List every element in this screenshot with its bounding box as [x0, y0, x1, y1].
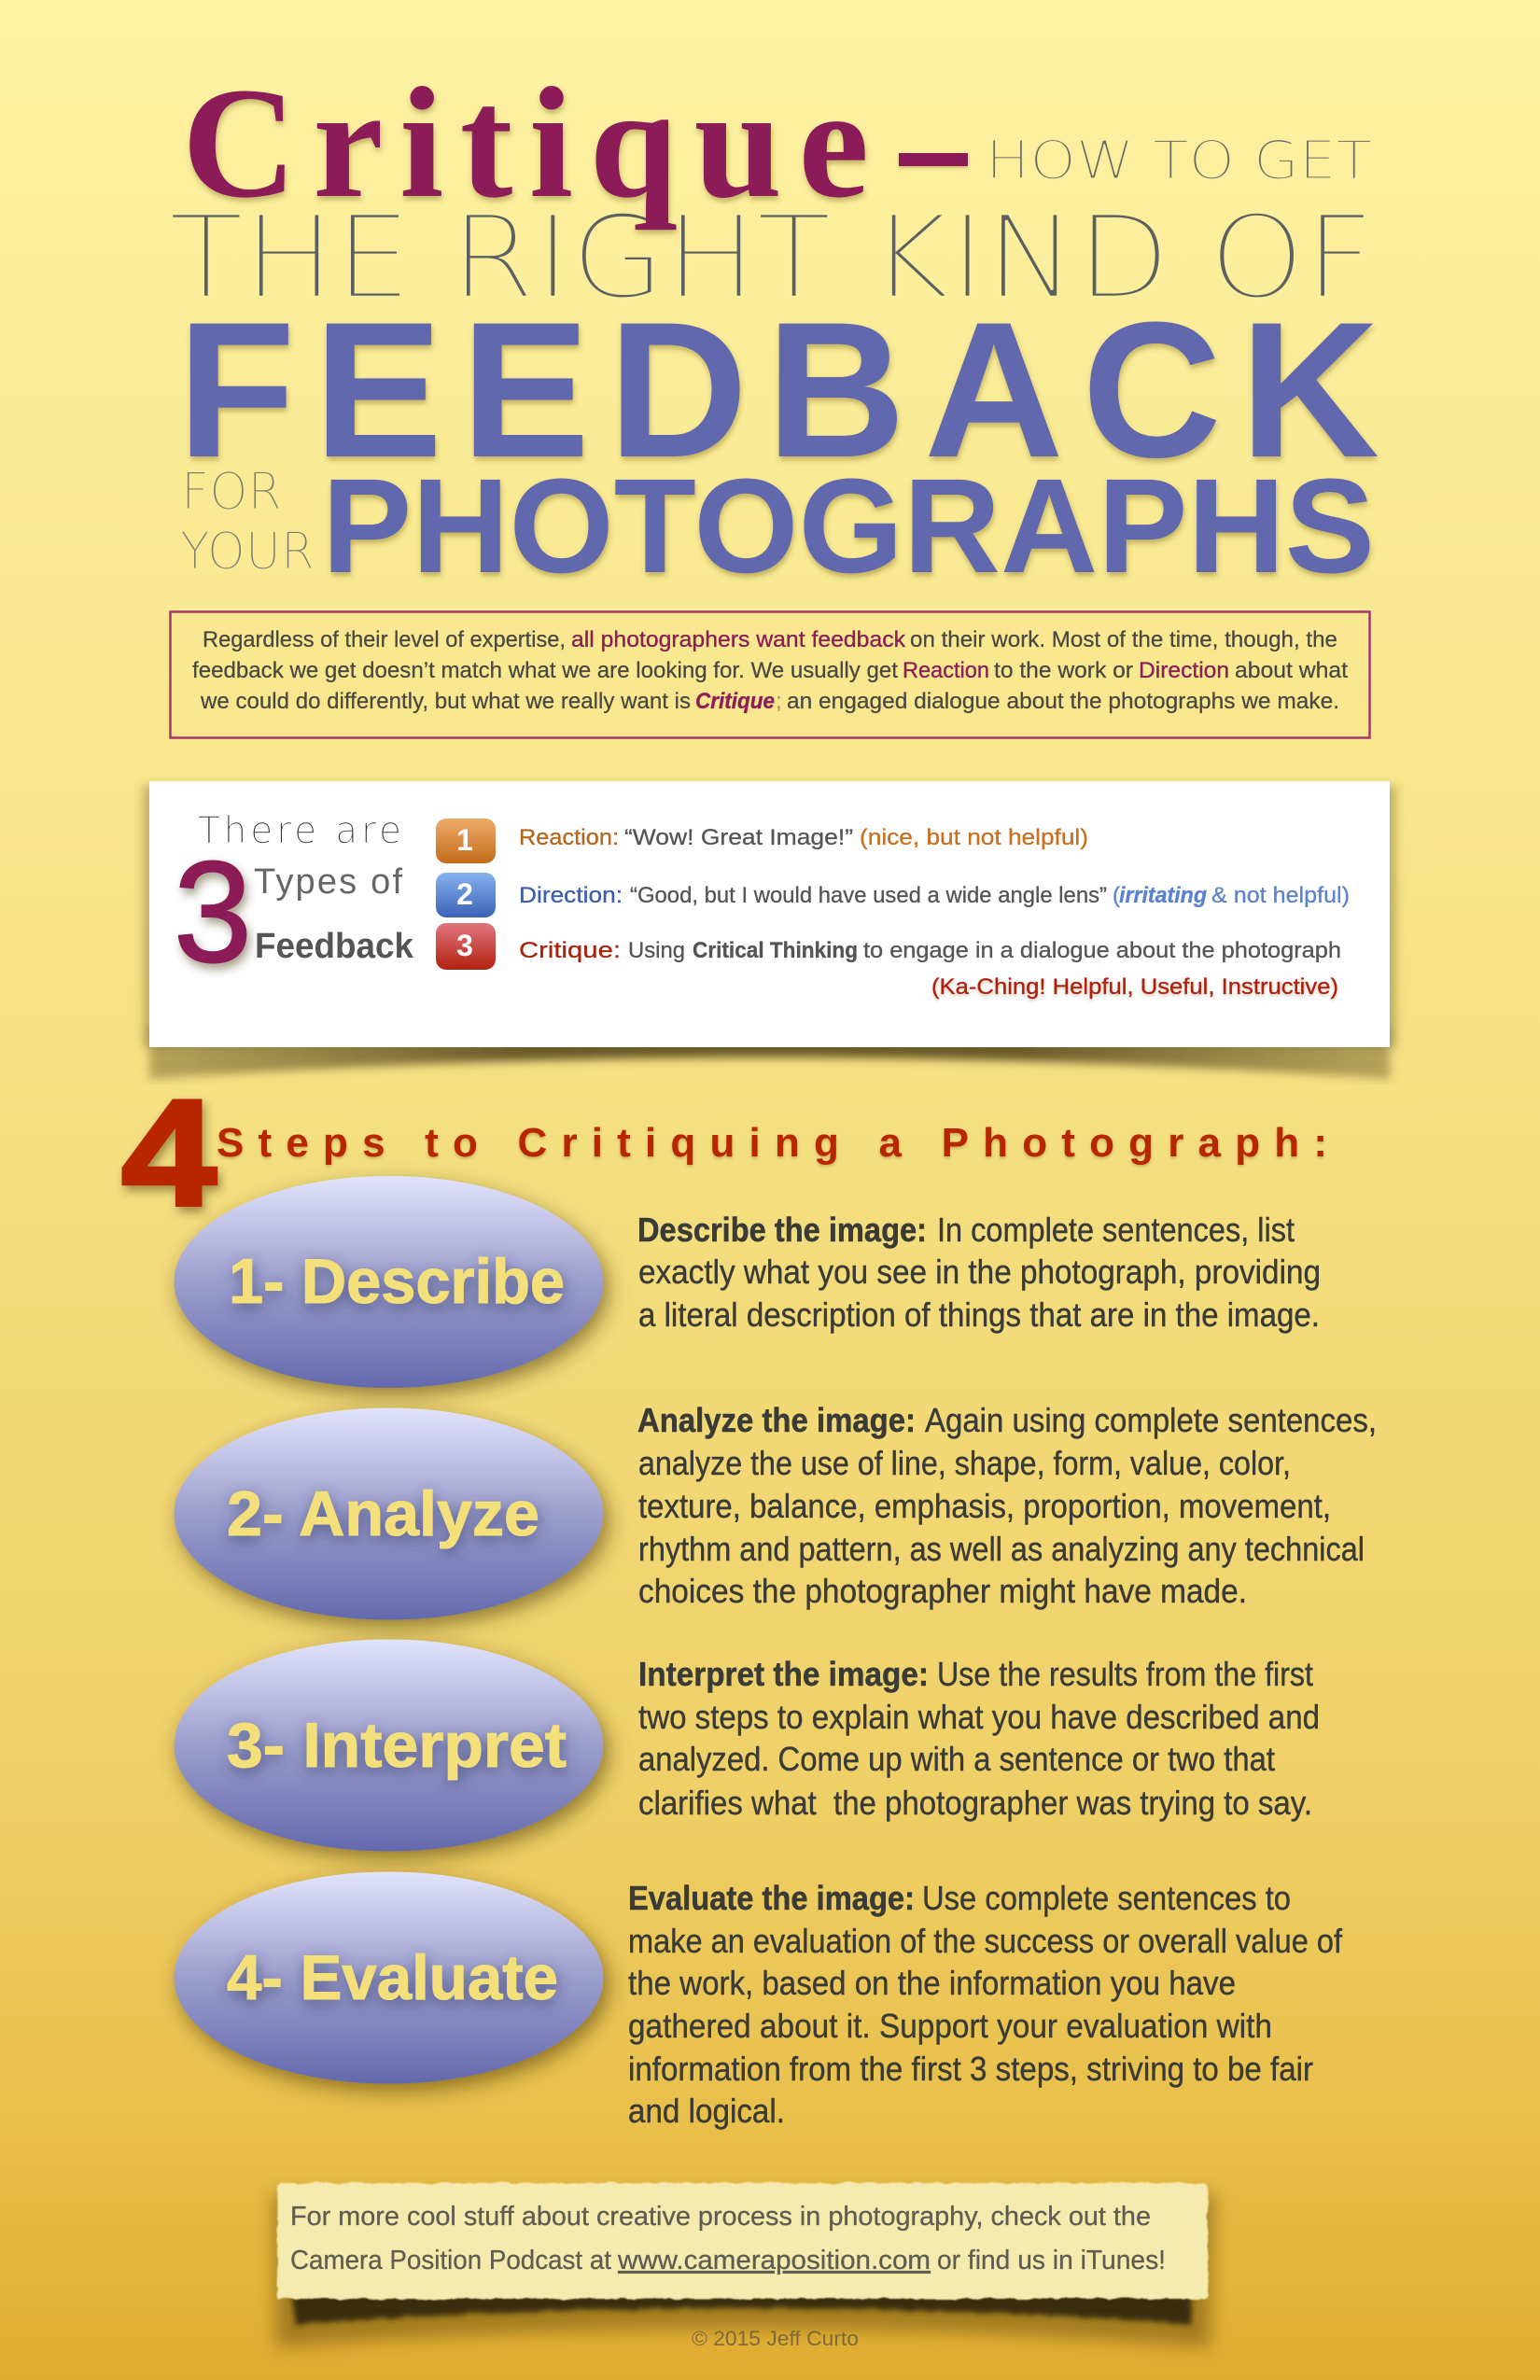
badge 2 [436, 873, 496, 917]
row: critique: Using [628, 938, 685, 963]
text: analyze: Analyze the image: [637, 1401, 916, 1439]
intro text box [170, 612, 1370, 737]
intro text box: we could do differently, but what we really want is [200, 689, 691, 714]
title block [169, 55, 1379, 601]
text: evaluate: Evaluate the image: [628, 1879, 915, 1917]
text: evaluate: information from the first 3 steps, striving to be fair [628, 2050, 1313, 2088]
text: interpret: clarifies what the photographer was trying to say. [638, 1784, 1312, 1822]
title: PHOTOGRAPHS: PHOTOGRAPHS [322, 451, 1375, 601]
callout: torn paper podcast note: or find us in iTunes! [937, 2246, 1166, 2275]
text: describe: In complete sentences, list [937, 1211, 1295, 1249]
oval: 2 analyze [174, 1407, 603, 1620]
row: critique [519, 938, 1341, 963]
subtitle: your: YOUR [180, 522, 315, 581]
text: analyze [637, 1401, 1377, 1610]
panel: 3 types of feedback [143, 781, 1396, 1079]
subtitle: the right kind of: THE RIGHT KIND OF [169, 191, 1375, 324]
big number 3: 3 [174, 832, 252, 992]
intro text box: feedback we get doesn’t match what we are looking for. We usually get [192, 658, 898, 683]
callout: torn paper podcast note: For more cool stuff about creative process in photography, check out the [290, 2202, 1151, 2232]
text: analyze: analyze the use of line, shape, form, value, color, [638, 1444, 1291, 1482]
oval: 2 analyze: 2- Analyze [227, 1478, 539, 1549]
text: evaluate: make an evaluation of the success or overall value of [628, 1922, 1343, 1960]
intro text box: Reaction [903, 658, 989, 683]
intro text box: ; [776, 689, 782, 714]
title: Critique: Critique [182, 55, 869, 231]
intro text box: on their work. Most of the time, though, the [910, 627, 1337, 652]
intro text box: about what [1235, 658, 1348, 683]
oval: 1 describe [174, 1176, 603, 1388]
title: FEEDBACK: FEEDBACK [177, 282, 1379, 497]
row: reaction: “Wow! Great Image!” [624, 825, 853, 850]
oval: 3 interpret: 3- Interpret [227, 1710, 567, 1781]
heading: types of: Types of [254, 862, 402, 902]
text: analyze: Again using complete sentences, [925, 1401, 1377, 1439]
oval: 4 evaluate [174, 1872, 603, 2083]
intro text box: an engaged dialogue about the photographs we make. [787, 689, 1339, 714]
title dash [899, 153, 968, 166]
row: critique: Critique: [519, 938, 621, 963]
intro text box: Direction [1139, 658, 1229, 683]
oval: 1 describe: 1- Describe [229, 1246, 565, 1317]
oval: 4 evaluate: 4- Evaluate [227, 1942, 558, 2013]
row: direction: ( [1113, 883, 1120, 908]
text: evaluate: the work, based on the information you have [628, 1964, 1236, 2002]
row: reaction [519, 825, 1088, 850]
text: analyze: texture, balance, emphasis, proportion, movement, [638, 1487, 1331, 1525]
text: analyze: rhythm and pattern, as well as analyzing any technical [638, 1530, 1365, 1568]
row: direction: & not helpful) [1211, 883, 1350, 908]
text: describe: Describe the image: [637, 1211, 927, 1249]
heading: steps to critiquing a photograph: Steps to Critiquing a Photograph: [217, 1120, 1327, 1166]
row: direction: Direction: [519, 883, 623, 908]
subtitle: how to get: HOW TO GET [986, 131, 1372, 191]
text: interpret: Use the results from the first [937, 1655, 1313, 1693]
row: critique: to engage in a dialogue about the photograph [863, 938, 1341, 963]
badge 3 [436, 923, 496, 970]
text: describe: exactly what you see in the photograph, providing [638, 1253, 1321, 1291]
text: interpret: Interpret the image: [638, 1655, 929, 1693]
text: interpret: two steps to explain what you have described and [638, 1698, 1320, 1736]
callout: torn paper podcast note: Camera Position Podcast at [290, 2246, 611, 2275]
intro text box: Regardless of their level of expertise, [203, 627, 566, 652]
heading: there are: There are [198, 810, 401, 852]
oval: 3 interpret [174, 1639, 603, 1852]
callout: torn paper podcast note: www.cameraposition.com [617, 2246, 931, 2275]
intro text box: Critique [695, 689, 775, 714]
heading: feedback: Feedback [255, 927, 414, 966]
badge 1: 1 [456, 823, 473, 857]
big number 4: 4 [121, 1069, 217, 1238]
text: describe [637, 1211, 1321, 1334]
text: evaluate: gathered about it. Support your evaluation with [628, 2007, 1272, 2045]
badge 1 [436, 819, 496, 863]
row: reaction: Reaction: [519, 825, 619, 850]
row: critique: Critical Thinking [693, 938, 858, 963]
text: interpret: analyzed. Come up with a sentence or two that [638, 1740, 1275, 1778]
row: direction: “Good, but I would have used a wide angle lens” [630, 883, 1107, 908]
text: evaluate [628, 1879, 1343, 2130]
text: evaluate: Use complete sentences to [922, 1879, 1291, 1917]
intro text box: to the work or [994, 658, 1133, 683]
callout: torn paper podcast note [273, 2183, 1215, 2347]
row: direction: irritating [1119, 883, 1207, 908]
text: analyze: choices the photographer might have made. [638, 1572, 1247, 1610]
text: describe: a literal description of things that are in the image. [638, 1295, 1320, 1334]
intro text box: all photographers want feedback [571, 627, 906, 652]
badge 2: 2 [456, 877, 473, 911]
row: direction [519, 883, 1350, 908]
subtitle: for: FOR [181, 462, 282, 521]
text: evaluate: and logical. [628, 2092, 785, 2130]
badge 3: 3 [456, 929, 473, 962]
row: reaction: (nice, but not helpful) [860, 825, 1088, 850]
copyright: © 2015 Jeff Curto [692, 2327, 859, 2350]
row: critique payoff: (Ka-Ching! Helpful, Useful, Instructive) [931, 974, 1338, 1000]
text: interpret [638, 1655, 1320, 1822]
